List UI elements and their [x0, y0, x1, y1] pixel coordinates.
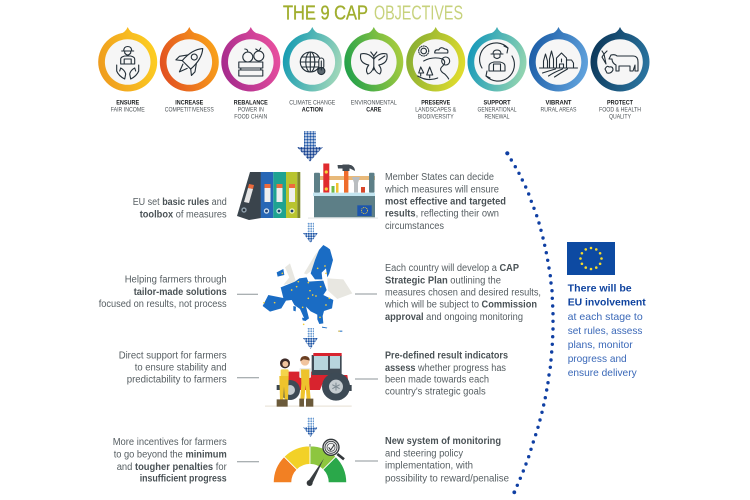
objective 9: protect food and health quality: QUALITY: [609, 114, 631, 121]
icon: cow, chicken, carrot: [590, 27, 650, 92]
icon: fruit crate: [221, 27, 280, 92]
text: EU rules: toolbox of measures: [140, 209, 227, 220]
objective 9: protect food and health quality: FOOD & HEALTH: [599, 107, 641, 114]
text: EU rules: EU set basic rules and: [133, 197, 227, 208]
text: monitoring system: [385, 436, 509, 485]
callout: EU involvement: ensure delivery: [568, 367, 637, 379]
objective 7: support generational renewal: GENERATIONAL: [478, 107, 517, 114]
objective 8: vibrant rural areas: [529, 27, 588, 114]
text: monitoring system: and steering policy: [385, 449, 463, 460]
text: member states: results, reflecting their own: [385, 209, 499, 220]
text: incentives: insufficient progress: [140, 474, 227, 485]
text: incentives: to go beyond the minimum: [114, 450, 227, 461]
objective 2: increase competitiveness: COMPETITIVENESS: [165, 107, 214, 114]
text: direct support: predictability to farmers: [127, 375, 227, 386]
objective 2: increase competitiveness: [160, 27, 219, 114]
objective 3: rebalance power in food chain: FOOD CHAIN: [234, 114, 267, 121]
objective 5: environmental care: [344, 27, 403, 114]
dotted bracket: [505, 151, 555, 494]
icon: woman farmer: [277, 358, 290, 407]
text: result indicators: been made towards each: [385, 375, 489, 386]
text: direct support: [119, 350, 227, 386]
text: member states: Member States can decide: [385, 172, 494, 183]
text: CAP strategic plan: measures chosen and desired results,: [385, 288, 541, 299]
objective 1: ensure fair income: FAIR INCOME: [111, 107, 145, 114]
text: result indicators: [385, 350, 508, 397]
objective 9: protect food and health quality: PROTECT: [607, 100, 633, 107]
text: direct support: to ensure stability and: [135, 363, 227, 374]
objective 4: climate change action: [283, 27, 342, 114]
arrow: dotted arrow 4: [303, 417, 318, 437]
objective 5: environmental care: ENVIRONMENTAL: [351, 100, 397, 107]
objective 3: rebalance power in food chain: [221, 27, 280, 121]
objective 7: support generational renewal: SUPPORT: [484, 100, 511, 107]
text: CAP strategic plan: Each country will develop a CAP: [385, 263, 519, 274]
text: tailor-made solutions: focused on results, not process: [99, 299, 227, 310]
icon: farmer in renewal cycle: [468, 27, 526, 92]
text: CAP strategic plan: approval and ongoing monitoring: [385, 312, 523, 323]
text: result indicators: assess whether progress has: [385, 363, 506, 374]
icon: farmers and tractor: [265, 353, 352, 407]
icon: globe and thermometer: [283, 27, 342, 92]
icon: toolbox: [308, 164, 378, 219]
callout: EU involvement: There will be: [568, 283, 632, 295]
text: member states: [384, 172, 506, 232]
text: tailor-made solutions: tailor-made solutions: [134, 287, 227, 298]
text: CAP strategic plan: Strategic Plan outlining the: [385, 276, 501, 287]
objective 7: support generational renewal: [468, 27, 526, 121]
callout: EU involvement: at each stage to: [568, 311, 643, 323]
icon: man farmer: [299, 356, 313, 407]
objective 3: rebalance power in food chain: REBALANCE: [234, 100, 268, 107]
callout: EU involvement: [568, 283, 646, 379]
text: monitoring system: New system of monitoring: [385, 436, 501, 447]
text: member states: circumstances: [385, 221, 444, 232]
chart: map of EU: [263, 245, 352, 332]
text: result indicators: country's strategic goals: [385, 386, 486, 397]
objective 7: support generational renewal: RENEWAL: [484, 114, 510, 121]
callout: EU involvement: set rules, assess: [568, 325, 642, 337]
objective 2: increase competitiveness: INCREASE: [175, 100, 203, 107]
text: CAP strategic plan: [384, 263, 541, 323]
icon: farmer with hands: [98, 27, 157, 92]
objective 1: ensure fair income: [98, 27, 157, 114]
connector lines: [237, 294, 378, 462]
objective 6: preserve landscapes and biodiversity: BIODIVERSITY: [418, 114, 454, 121]
icon: binders: [237, 172, 300, 220]
objective 5: environmental care: CARE: [366, 107, 381, 114]
icon: farmhouse and fields: [529, 27, 588, 92]
text: tailor-made solutions: Helping farmers through: [125, 275, 227, 286]
objective 9: protect food and health quality: [590, 27, 650, 121]
objective 6: preserve landscapes and biodiversity: PRESERVE: [421, 100, 450, 107]
chart: performance gauge: [273, 439, 347, 486]
text: direct support: Direct support for farmers: [119, 350, 227, 361]
text: member states: most effective and targeted: [385, 196, 506, 207]
text: CAP strategic plan: which will be subject to Commission: [384, 300, 537, 311]
arrow: dotted arrow 2: [303, 222, 318, 243]
objective 6: preserve landscapes and biodiversity: [406, 27, 465, 121]
text: tailor-made solutions: [99, 275, 227, 310]
icon: landscape: [406, 27, 465, 92]
text: monitoring system: possibility to reward/penalise: [385, 474, 509, 485]
arrow: main dotted arrow: [297, 131, 323, 162]
text: result indicators: Pre-defined result indicators: [385, 350, 508, 361]
icon: EU flag: [567, 242, 615, 275]
text: member states: which measures will ensure: [384, 184, 499, 196]
text: EU rules: [133, 197, 227, 220]
objective 8: vibrant rural areas: RURAL AREAS: [540, 107, 576, 114]
objective 4: climate change action: ACTION: [302, 107, 323, 114]
text: incentives: and tougher penalties for: [117, 462, 227, 473]
arrow: dotted arrow 3: [303, 328, 318, 349]
callout: EU involvement: EU involvement: [568, 297, 646, 309]
icon: magnifier: [323, 439, 344, 459]
objective 6: preserve landscapes and biodiversity: LANDSCAPES &: [415, 107, 457, 114]
callout: EU involvement: progress and: [568, 353, 627, 365]
title: THE 9 CAP: [283, 2, 368, 24]
icon: butterfly: [344, 27, 403, 92]
title: OBJECTIVES: [374, 2, 463, 24]
objective 8: vibrant rural areas: VIBRANT: [546, 100, 572, 107]
objective 3: rebalance power in food chain: POWER IN: [238, 107, 264, 114]
icon: rocket: [160, 27, 219, 92]
callout: EU involvement: plans, monitor: [568, 339, 633, 351]
title: [283, 2, 463, 24]
objective 1: ensure fair income: ENSURE: [116, 100, 139, 107]
text: incentives: [113, 437, 227, 485]
text: monitoring system: implementation, with: [385, 460, 473, 471]
objective 4: climate change action: CLIMATE CHANGE: [289, 100, 335, 107]
text: incentives: More incentives for farmers: [113, 437, 227, 448]
icon: needle: [308, 458, 324, 484]
